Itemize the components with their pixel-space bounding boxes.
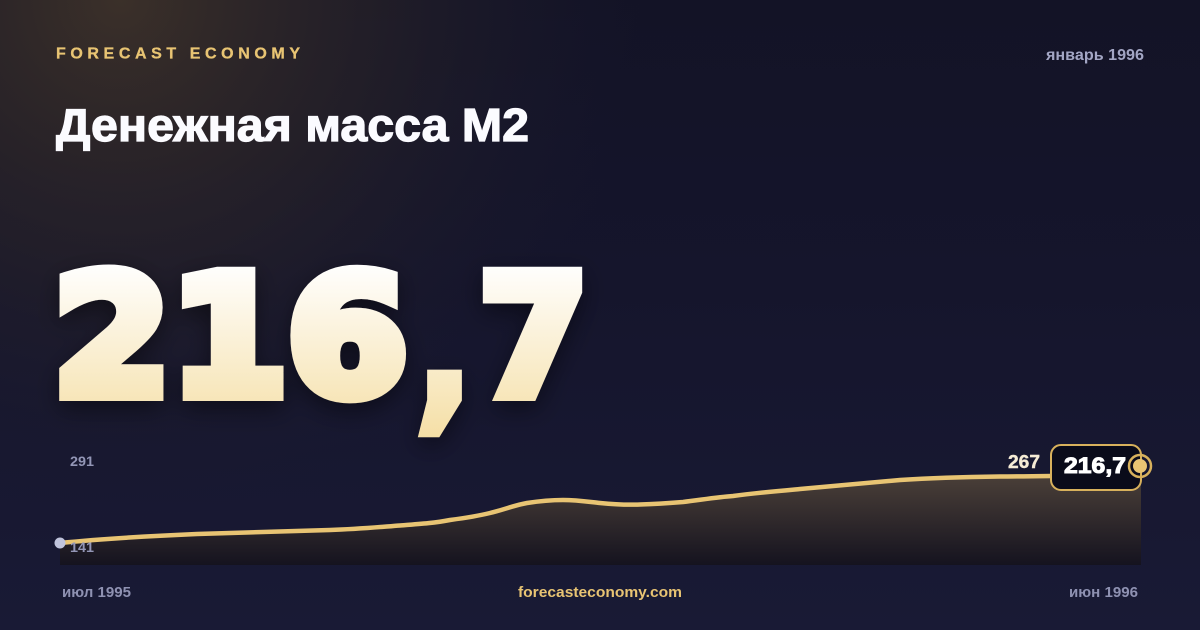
area fill bbox=[60, 470, 1141, 565]
value callout bbox=[1051, 445, 1141, 490]
end marker bbox=[1129, 455, 1151, 477]
brand label: FORECAST ECONOMY bbox=[56, 46, 300, 62]
value callout: 216,7 bbox=[1064, 453, 1126, 478]
big value bbox=[53, 227, 588, 454]
website: forecasteconomy.com bbox=[518, 584, 682, 601]
big value: 7 bbox=[479, 241, 588, 433]
big value: 6 bbox=[287, 241, 408, 433]
start date: июл 1995 bbox=[62, 584, 131, 601]
axis min: 141 bbox=[70, 539, 94, 555]
chart bbox=[54, 445, 1151, 565]
date: январь 1996 bbox=[1046, 47, 1144, 64]
axis max: 291 bbox=[70, 453, 94, 469]
end date: июн 1996 bbox=[1069, 584, 1138, 601]
big value: , bbox=[410, 227, 479, 454]
start marker bbox=[54, 538, 66, 548]
peak value: 267 bbox=[1008, 452, 1040, 472]
big value: 2 bbox=[53, 241, 171, 433]
title: Денежная масса М2 bbox=[56, 99, 529, 151]
big value: 1 bbox=[170, 241, 288, 433]
line bbox=[60, 476, 1052, 543]
